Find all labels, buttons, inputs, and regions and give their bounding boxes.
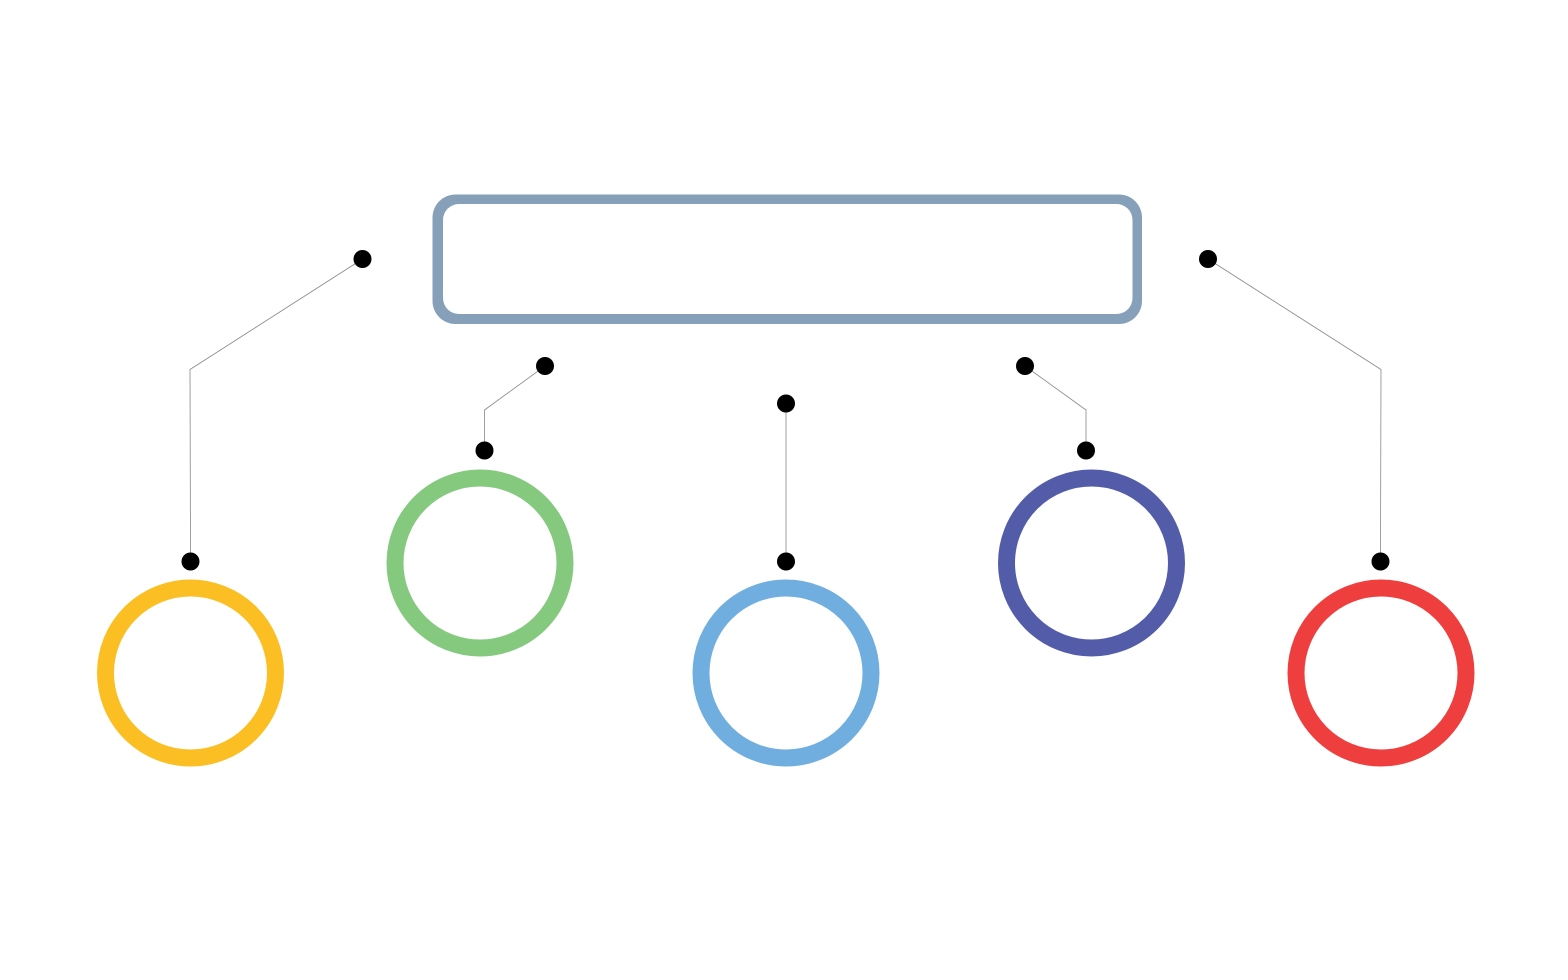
connector: yellow: [182, 250, 372, 570]
circle: blue: [701, 588, 871, 758]
circle: red: [1296, 588, 1466, 758]
connector: indigo: [1016, 357, 1095, 460]
circle: yellow: [106, 588, 276, 758]
connector: green: [476, 357, 554, 460]
top rounded box: [432, 194, 1142, 324]
connector: blue: [777, 394, 795, 570]
circle: indigo: [1006, 478, 1176, 648]
connector: red: [1199, 250, 1390, 570]
circle: green: [395, 478, 565, 648]
